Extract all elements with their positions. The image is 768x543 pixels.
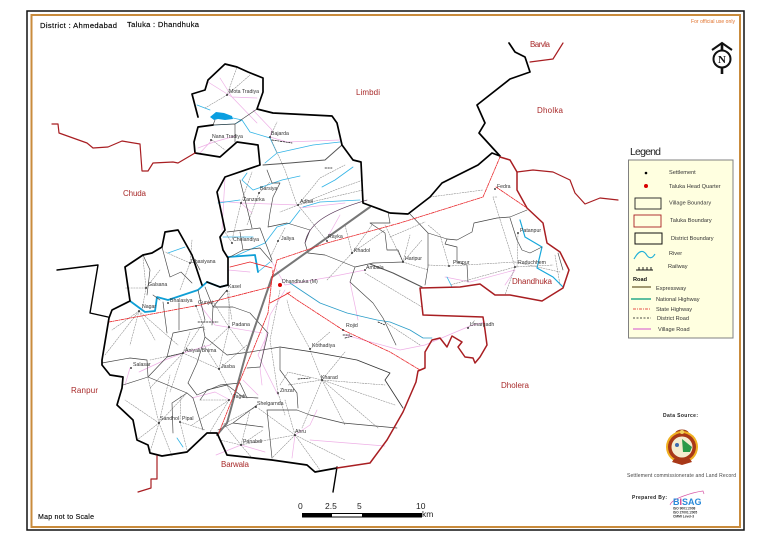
lake [210,112,233,120]
neighbouring taluka names: Limbdi [356,88,380,97]
settlements: Galsana [148,282,167,288]
legend: national highway: National Highway [656,297,700,303]
settlements: Raduchhem [518,260,546,266]
settlements: Jasba [221,364,235,370]
icon: settlement commissionerate emblem [666,430,698,465]
settlements: Pipal [182,416,194,422]
legend: expressway: Expressway [656,286,686,292]
scale bar: 5 [357,501,362,511]
settlements: Barsiya [260,186,277,192]
legend: taluka head quarter: Taluka Head Quarter [669,184,721,190]
legend: settlement [645,170,696,176]
settlements: Bhalasiya [170,298,193,304]
logo: BISAG: CMMI Level-3 [673,514,694,518]
settlements: Rojid [346,323,358,329]
note: for official use only: For official use only [691,19,736,25]
settlements: Salasar [133,362,151,368]
state highways [109,157,527,435]
settlements: Adhel [300,199,313,205]
neighbouring taluka names: Dholka [537,106,564,115]
panel: legend [628,160,733,338]
taluka boundary [337,157,569,468]
settlements: Mota Tradiya [229,89,259,95]
legend: district boundary: District Boundary [671,236,714,242]
scale bar [298,501,433,519]
settlements: Dhasiyana [191,259,216,265]
legend heading: Legend [630,146,661,158]
neighbour boundary: Dholka [517,170,618,204]
neighbouring taluka names: Barwala [221,460,250,469]
settlements: Haripur [405,256,422,262]
settlements: Kothadiya [312,343,335,349]
legend: national highway [631,297,700,303]
settlements: Panabdi [243,439,262,445]
prepared by label: Prepared By: [632,495,667,501]
neighbour boundary: Chuda [52,124,195,171]
main river Patanpur [520,220,563,287]
data source heading: Data Source: [663,413,698,419]
settlements: Tagdi [233,394,245,400]
settlements: Shelgarnda [257,401,284,407]
district boundary [102,43,530,472]
logo: BISAG: ISO 27001:2005 [673,510,697,514]
settlements: Zinzar [280,388,295,394]
settlements: Bajarda [271,131,289,137]
icon: north arrow: N [718,54,726,66]
legend: settlement: Settlement [669,170,696,176]
note: map not to scale: Map not to Scale [38,514,94,521]
national highway and railway [217,207,370,435]
south stub boundary [333,467,337,492]
title: district and taluka [40,20,200,30]
settlements: Ahru [295,429,306,435]
legend: railway: Railway [668,264,688,270]
settlements [130,89,546,446]
neighbouring taluka names: Ranpur [71,386,98,395]
state highway loop [230,262,290,303]
settlements: Aniyali Bhima [185,348,217,354]
title: district and taluka: Taluka : Dhandhuka [127,20,200,29]
settlements: Sandhol [160,416,179,422]
settlements: Ambala [366,265,384,271]
legend: river [634,251,682,259]
neighbouring taluka names [71,40,564,469]
legend: taluka boundary [634,215,712,227]
scale bar: 10 [416,501,426,511]
legend: district boundary [635,233,714,244]
legend: expressway [632,286,686,292]
settlements: Nana Tradiya [212,134,243,140]
minor rivers [168,105,452,447]
neighbouring taluka names: Dhandhuka [512,277,553,286]
scale bar: km [422,509,433,519]
settlements: Dhandhuka (M) [282,279,318,285]
dashed cart tracks [105,67,560,470]
district road segments [198,140,385,379]
settlements: Chelandiya [233,237,259,243]
settlements: Khadol [354,248,370,254]
neighbouring taluka names: Chuda [123,189,147,198]
legend: road heading: Road [633,277,648,283]
settlements: Gunjar [198,300,214,306]
settlements: Pimpur [453,260,470,266]
legend: railway [636,264,688,270]
title: district and taluka: District : Ahmedabad [40,21,117,30]
legend: district road [633,316,689,322]
data source name: Settlement commissionerate and Land Record [627,473,736,479]
logo: BISAG: ISO 9001:2008 [673,506,696,510]
settlements: Kharad [321,375,338,381]
settlements: Patanpur [520,228,541,234]
legend: state highway [633,307,692,313]
main river Nagar [130,255,258,312]
settlements: Fedra [497,184,511,190]
neighbour boundary: Barwala north [530,43,563,62]
settlements: Kasel [228,284,241,290]
legend: village road [633,327,690,333]
settlements: Jaliya [281,236,294,242]
legend: state highway: State Highway [656,307,692,313]
logo: BISAG [670,491,704,518]
legend: village boundary: Village Boundary [669,200,711,206]
west stub boundary [57,265,108,317]
logo: BISAG: BISAG [673,497,702,507]
settlements: Padana [232,322,250,328]
legend: village road: Village Road [658,327,690,333]
neighbouring taluka names: Dholera [501,381,530,390]
scale bar: 2.5 [325,501,337,511]
settlements: Nagar [142,304,156,310]
legend: river: River [669,251,682,257]
legend: taluka head quarter [644,184,721,190]
village roads [125,78,515,458]
settlements: Umargadh [470,322,494,328]
neighbouring taluka names: Barvla [530,40,551,49]
neighbour boundary: Ranpur [138,456,157,492]
village boundaries [102,109,563,458]
legend: village boundary [635,198,711,209]
scale bar: 0 [298,501,303,511]
settlements: Zanzarka [243,197,265,203]
settlements: Rayka [328,234,343,240]
legend: district road: District Road [657,316,689,322]
map: taluka [52,40,618,492]
icon: north arrow [712,43,732,74]
legend: taluka boundary: Taluka Boundary [670,218,712,224]
